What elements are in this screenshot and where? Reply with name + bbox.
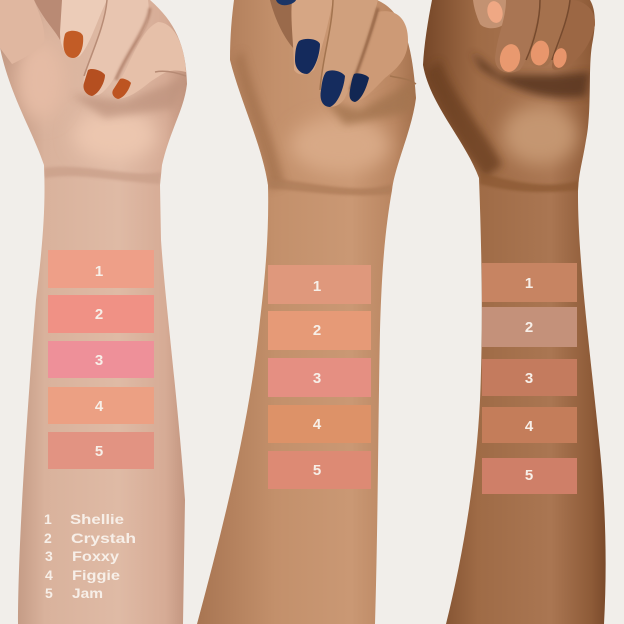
- arm: medium skin: [190, 0, 430, 624]
- shade legend: 4: [45, 567, 53, 583]
- swatches: arm 3: [482, 263, 577, 494]
- swatches: arm 2: [268, 265, 371, 489]
- shade legend: 3: [45, 548, 53, 564]
- shade legend: [44, 511, 136, 601]
- swatches: arm 2: 5: [313, 462, 321, 479]
- arm: deep skin: [415, 0, 610, 624]
- swatches: arm 3: 5: [525, 467, 533, 484]
- shade legend: 2: [44, 530, 52, 546]
- swatches: arm 1: 1: [95, 263, 103, 280]
- shade legend: Foxxy: [72, 548, 119, 564]
- swatches: arm 2: 1: [313, 278, 321, 295]
- fingers: [270, 0, 416, 107]
- shade legend: Jam: [72, 585, 103, 601]
- swatches: arm 3: 2: [525, 319, 533, 336]
- nails: orange polish: [63, 31, 131, 99]
- swatches: arm 2: 2: [313, 322, 321, 339]
- shade legend: 1: [44, 511, 52, 527]
- fingers: [473, 0, 595, 73]
- swatches: arm 1: 3: [95, 352, 103, 369]
- nails: navy polish: [276, 0, 369, 107]
- nails: peach polish: [485, 0, 568, 74]
- shade legend: Shellie: [70, 511, 124, 527]
- swatches: arm 2: 4: [313, 416, 322, 433]
- shade legend: Figgie: [72, 567, 120, 583]
- swatches: arm 3: 4: [525, 418, 534, 435]
- shade legend: Crystah: [71, 530, 136, 546]
- swatches: arm 1: 4: [95, 398, 104, 415]
- swatches: arm 1: [48, 250, 154, 469]
- swatches: arm 3: 1: [525, 275, 533, 292]
- swatches: arm 3: 3: [525, 370, 533, 387]
- swatches: arm 1: 5: [95, 443, 103, 460]
- arm: light skin: [0, 0, 200, 624]
- fingers: [0, 0, 186, 99]
- swatches: arm 1: 2: [95, 306, 103, 323]
- swatches: arm 2: 3: [313, 370, 321, 387]
- shade legend: 5: [45, 585, 53, 601]
